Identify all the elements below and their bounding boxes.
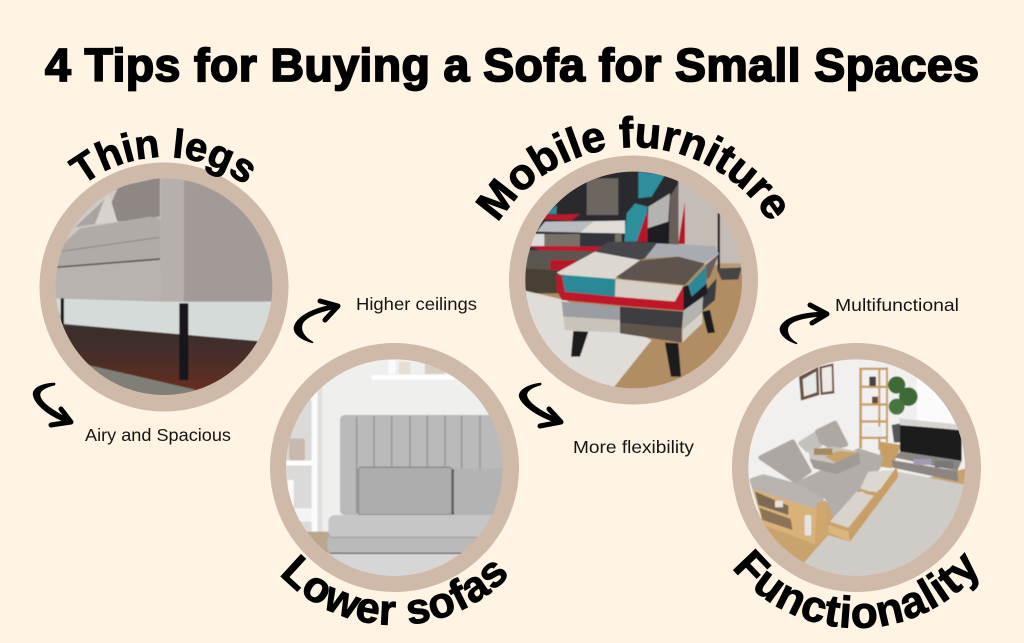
photo: sofa with thin legs [56, 178, 272, 395]
ring: thin legs [40, 162, 288, 412]
ring: lower sofas [270, 343, 519, 592]
caption: multifunctional: Multifunctional [835, 295, 959, 315]
ring: mobile furniture [509, 156, 758, 404]
caption: more flexibility: More flexibility [573, 437, 694, 457]
photo: low sofa [282, 357, 510, 583]
caption: higher ceilings: Higher ceilings [356, 294, 477, 314]
heading: lower sofas: Lower sofas [280, 554, 507, 626]
photo: patchwork ottoman [522, 167, 748, 393]
arrow: functionality [780, 305, 827, 344]
panel: mobile furniture [475, 116, 785, 404]
caption: airy and spacious: Airy and Spacious [85, 425, 231, 445]
panel: thin legs [40, 128, 288, 412]
heading: thin legs: Thin legs [67, 128, 254, 182]
heading: functionality: Functionality [732, 548, 979, 628]
arrow: lower sofas [294, 301, 338, 343]
arrow: thin legs [33, 383, 71, 425]
title: 4 Tips for Buying a Sofa for Small Spaces [45, 39, 979, 91]
panel: lower sofas [270, 343, 519, 626]
arrow: mobile furniture [519, 383, 561, 426]
panel: functionality [732, 343, 981, 628]
heading: mobile furniture: Mobile furniture [475, 116, 785, 221]
photo: storage sofa [748, 359, 965, 576]
ring: functionality [732, 343, 981, 592]
